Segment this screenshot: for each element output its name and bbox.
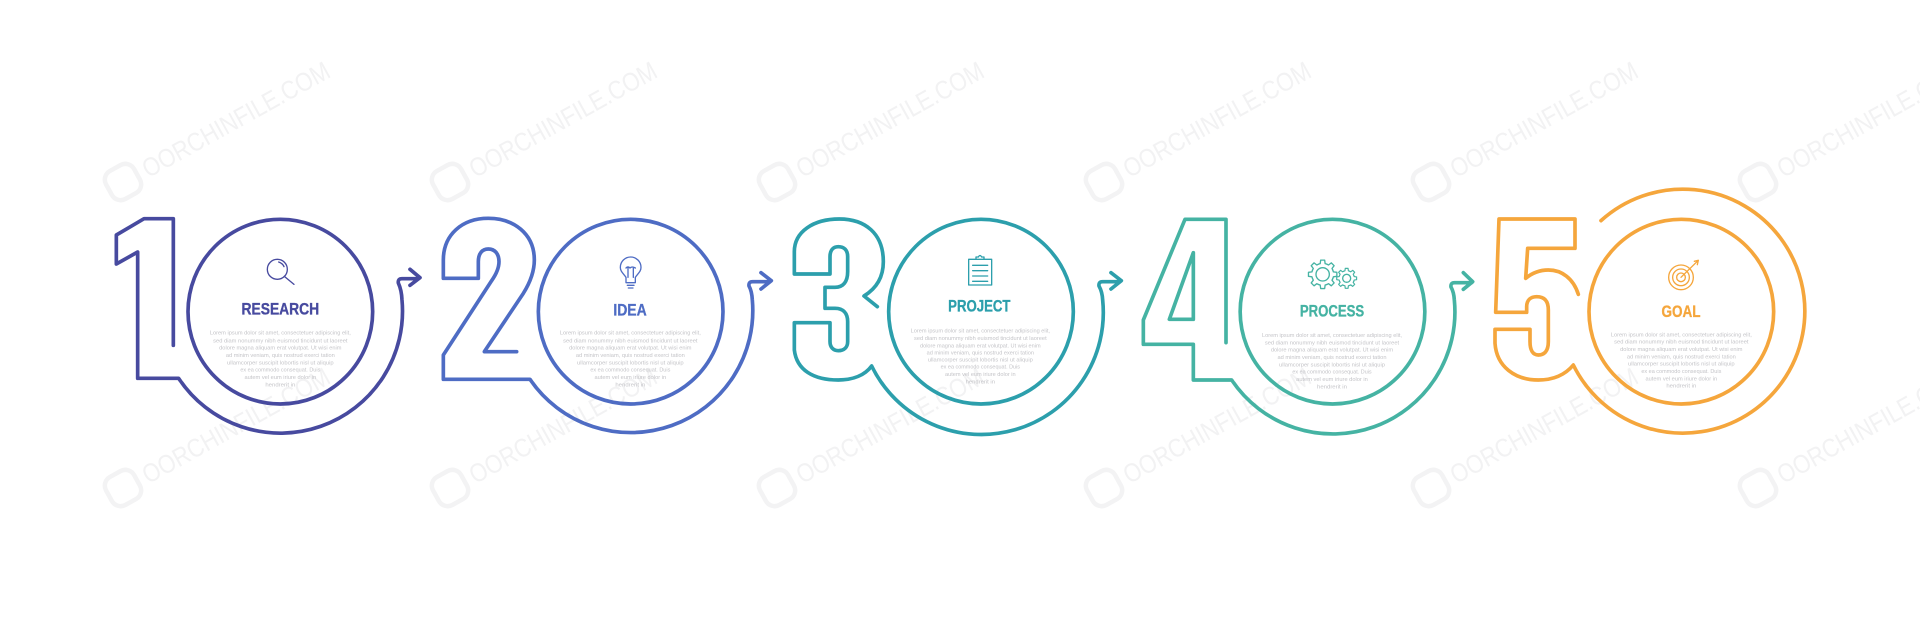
- text block: research: sed diam nonummy nibh euismod tincidunt ut laoreet: [213, 338, 348, 344]
- text block: goal: ullamcorper suscipit lobortis nisl ut aliquip: [1628, 362, 1735, 368]
- numeral 5 with full ring: [1495, 189, 1805, 433]
- text block: project: ullamcorper suscipit lobortis nisl ut aliquip: [928, 358, 1033, 364]
- watermark pattern: OORCHINFILE.COM: [791, 361, 989, 489]
- text block: research: ex ea commodo consequat. Duis: [240, 368, 320, 374]
- text block: project: ad minim veniam, quis nostrud exerci tation: [927, 351, 1034, 357]
- icon: light bulb: [620, 257, 641, 288]
- text block: process: dolore magna aliquam erat volutpat. Ut wisi enim: [1271, 348, 1393, 354]
- watermark pattern: OORCHINFILE.COM: [137, 55, 335, 183]
- heading: process: PROCESS: [1300, 303, 1364, 321]
- text block: goal: Lorem ipsum dolor sit amet, consectetuer adipiscing elit,: [1611, 332, 1752, 338]
- text block: research: Lorem ipsum dolor sit amet, consectetuer adipiscing elit,: [210, 331, 351, 337]
- text block: idea: ad minim veniam, quis nostrud exerci tation: [576, 353, 685, 359]
- icon: target with arrow: [1669, 260, 1698, 290]
- heading: idea: IDEA: [613, 301, 647, 319]
- watermark pattern: OORCHINFILE.COM: [464, 55, 662, 183]
- panel: step 3 project: [794, 219, 1121, 434]
- text block: idea: hendrerit in: [615, 382, 645, 388]
- watermark pattern: OORCHINFILE.COM: [137, 361, 335, 489]
- heading: research: RESEARCH: [241, 300, 319, 318]
- numeral 4 inner triangle: [1169, 253, 1193, 319]
- panel: step 2 idea: [443, 218, 771, 433]
- numeral 1 with arc and arrow: [116, 219, 420, 433]
- text block: process: [1262, 333, 1402, 390]
- heading: project: PROJECT: [948, 298, 1011, 316]
- text block: research: ad minim veniam, quis nostrud exerci tation: [226, 353, 335, 359]
- text block: process: hendrerit in: [1317, 384, 1347, 390]
- text block: research: autem vel eum iriure dolor in: [244, 375, 316, 381]
- panel: step 5 goal: [1495, 189, 1805, 433]
- watermark pattern: OORCHINFILE.COM: [1445, 55, 1643, 183]
- icon: gears: [1308, 260, 1357, 289]
- text block: project: sed diam nonummy nibh euismod tincidunt ut laoreet: [914, 336, 1047, 342]
- text block: goal: [1611, 332, 1752, 390]
- text block: project: ex ea commodo consequat. Duis: [941, 365, 1020, 371]
- text block: project: autem vel eum iriure dolor in: [945, 372, 1016, 378]
- text block: idea: autem vel eum iriure dolor in: [594, 375, 666, 381]
- text block: idea: dolore magna aliquam erat volutpat. Ut wisi enim: [569, 346, 692, 352]
- text block: process: ullamcorper suscipit lobortis nisl ut aliquip: [1279, 362, 1385, 368]
- text block: goal: autem vel eum iriure dolor in: [1645, 376, 1717, 382]
- text block: process: ex ea commodo consequat. Duis: [1292, 370, 1372, 376]
- text block: goal: ex ea commodo consequat. Duis: [1641, 369, 1721, 375]
- watermark pattern: OORCHINFILE.COM: [1445, 361, 1643, 489]
- icon: magnifier: [267, 259, 294, 284]
- watermark pattern: OORCHINFILE.COM: [1118, 361, 1316, 489]
- text block: research: dolore magna aliquam erat volutpat. Ut wisi enim: [219, 346, 342, 352]
- watermark pattern: [101, 55, 1920, 510]
- text block: goal: dolore magna aliquam erat volutpat. Ut wisi enim: [1620, 347, 1743, 353]
- text block: process: autem vel eum iriure dolor in: [1296, 377, 1368, 383]
- text block: project: [911, 328, 1050, 385]
- text block: idea: ullamcorper suscipit lobortis nisl ut aliquip: [577, 360, 684, 366]
- text block: research: ullamcorper suscipit lobortis nisl ut aliquip: [227, 360, 334, 366]
- text block: idea: sed diam nonummy nibh euismod tincidunt ut laoreet: [563, 338, 698, 344]
- text block: process: ad minim veniam, quis nostrud exerci tation: [1277, 355, 1386, 361]
- numeral 3 with arc and arrow: [794, 219, 1121, 434]
- heading: goal: GOAL: [1661, 303, 1701, 321]
- text block: idea: [560, 331, 701, 388]
- watermark pattern: OORCHINFILE.COM: [791, 55, 989, 183]
- text block: idea: Lorem ipsum dolor sit amet, consectetuer adipiscing elit,: [560, 331, 701, 337]
- text block: goal: sed diam nonummy nibh euismod tincidunt ut laoreet: [1614, 340, 1749, 346]
- text block: research: hendrerit in: [265, 382, 295, 388]
- panel: step 4 process: [1143, 219, 1473, 434]
- circle: [1240, 219, 1425, 404]
- circle: [188, 219, 373, 404]
- text block: project: dolore magna aliquam erat volutpat. Ut wisi enim: [920, 343, 1041, 349]
- text block: goal: ad minim veniam, quis nostrud exerci tation: [1627, 354, 1736, 360]
- panel: step 1 research: [116, 219, 420, 433]
- watermark pattern: OORCHINFILE.COM: [464, 361, 662, 489]
- circle: [1589, 219, 1774, 404]
- numeral 4 with arc and arrow: [1143, 219, 1473, 434]
- text block: goal: hendrerit in: [1666, 384, 1696, 390]
- text block: project: hendrerit in: [966, 379, 995, 385]
- numeral 2 with arc and arrow: [443, 218, 771, 433]
- text block: process: sed diam nonummy nibh euismod tincidunt ut laoreet: [1265, 340, 1400, 346]
- text block: project: Lorem ipsum dolor sit amet, consectetuer adipiscing elit,: [911, 328, 1050, 334]
- text block: research: [210, 331, 351, 388]
- watermark pattern: OORCHINFILE.COM: [1118, 55, 1316, 183]
- circle: [538, 219, 723, 404]
- icon: clipboard: [969, 255, 992, 285]
- text block: process: Lorem ipsum dolor sit amet, consectetuer adipiscing elit,: [1262, 333, 1402, 339]
- text block: idea: ex ea commodo consequat. Duis: [590, 368, 670, 374]
- circle: [889, 219, 1073, 404]
